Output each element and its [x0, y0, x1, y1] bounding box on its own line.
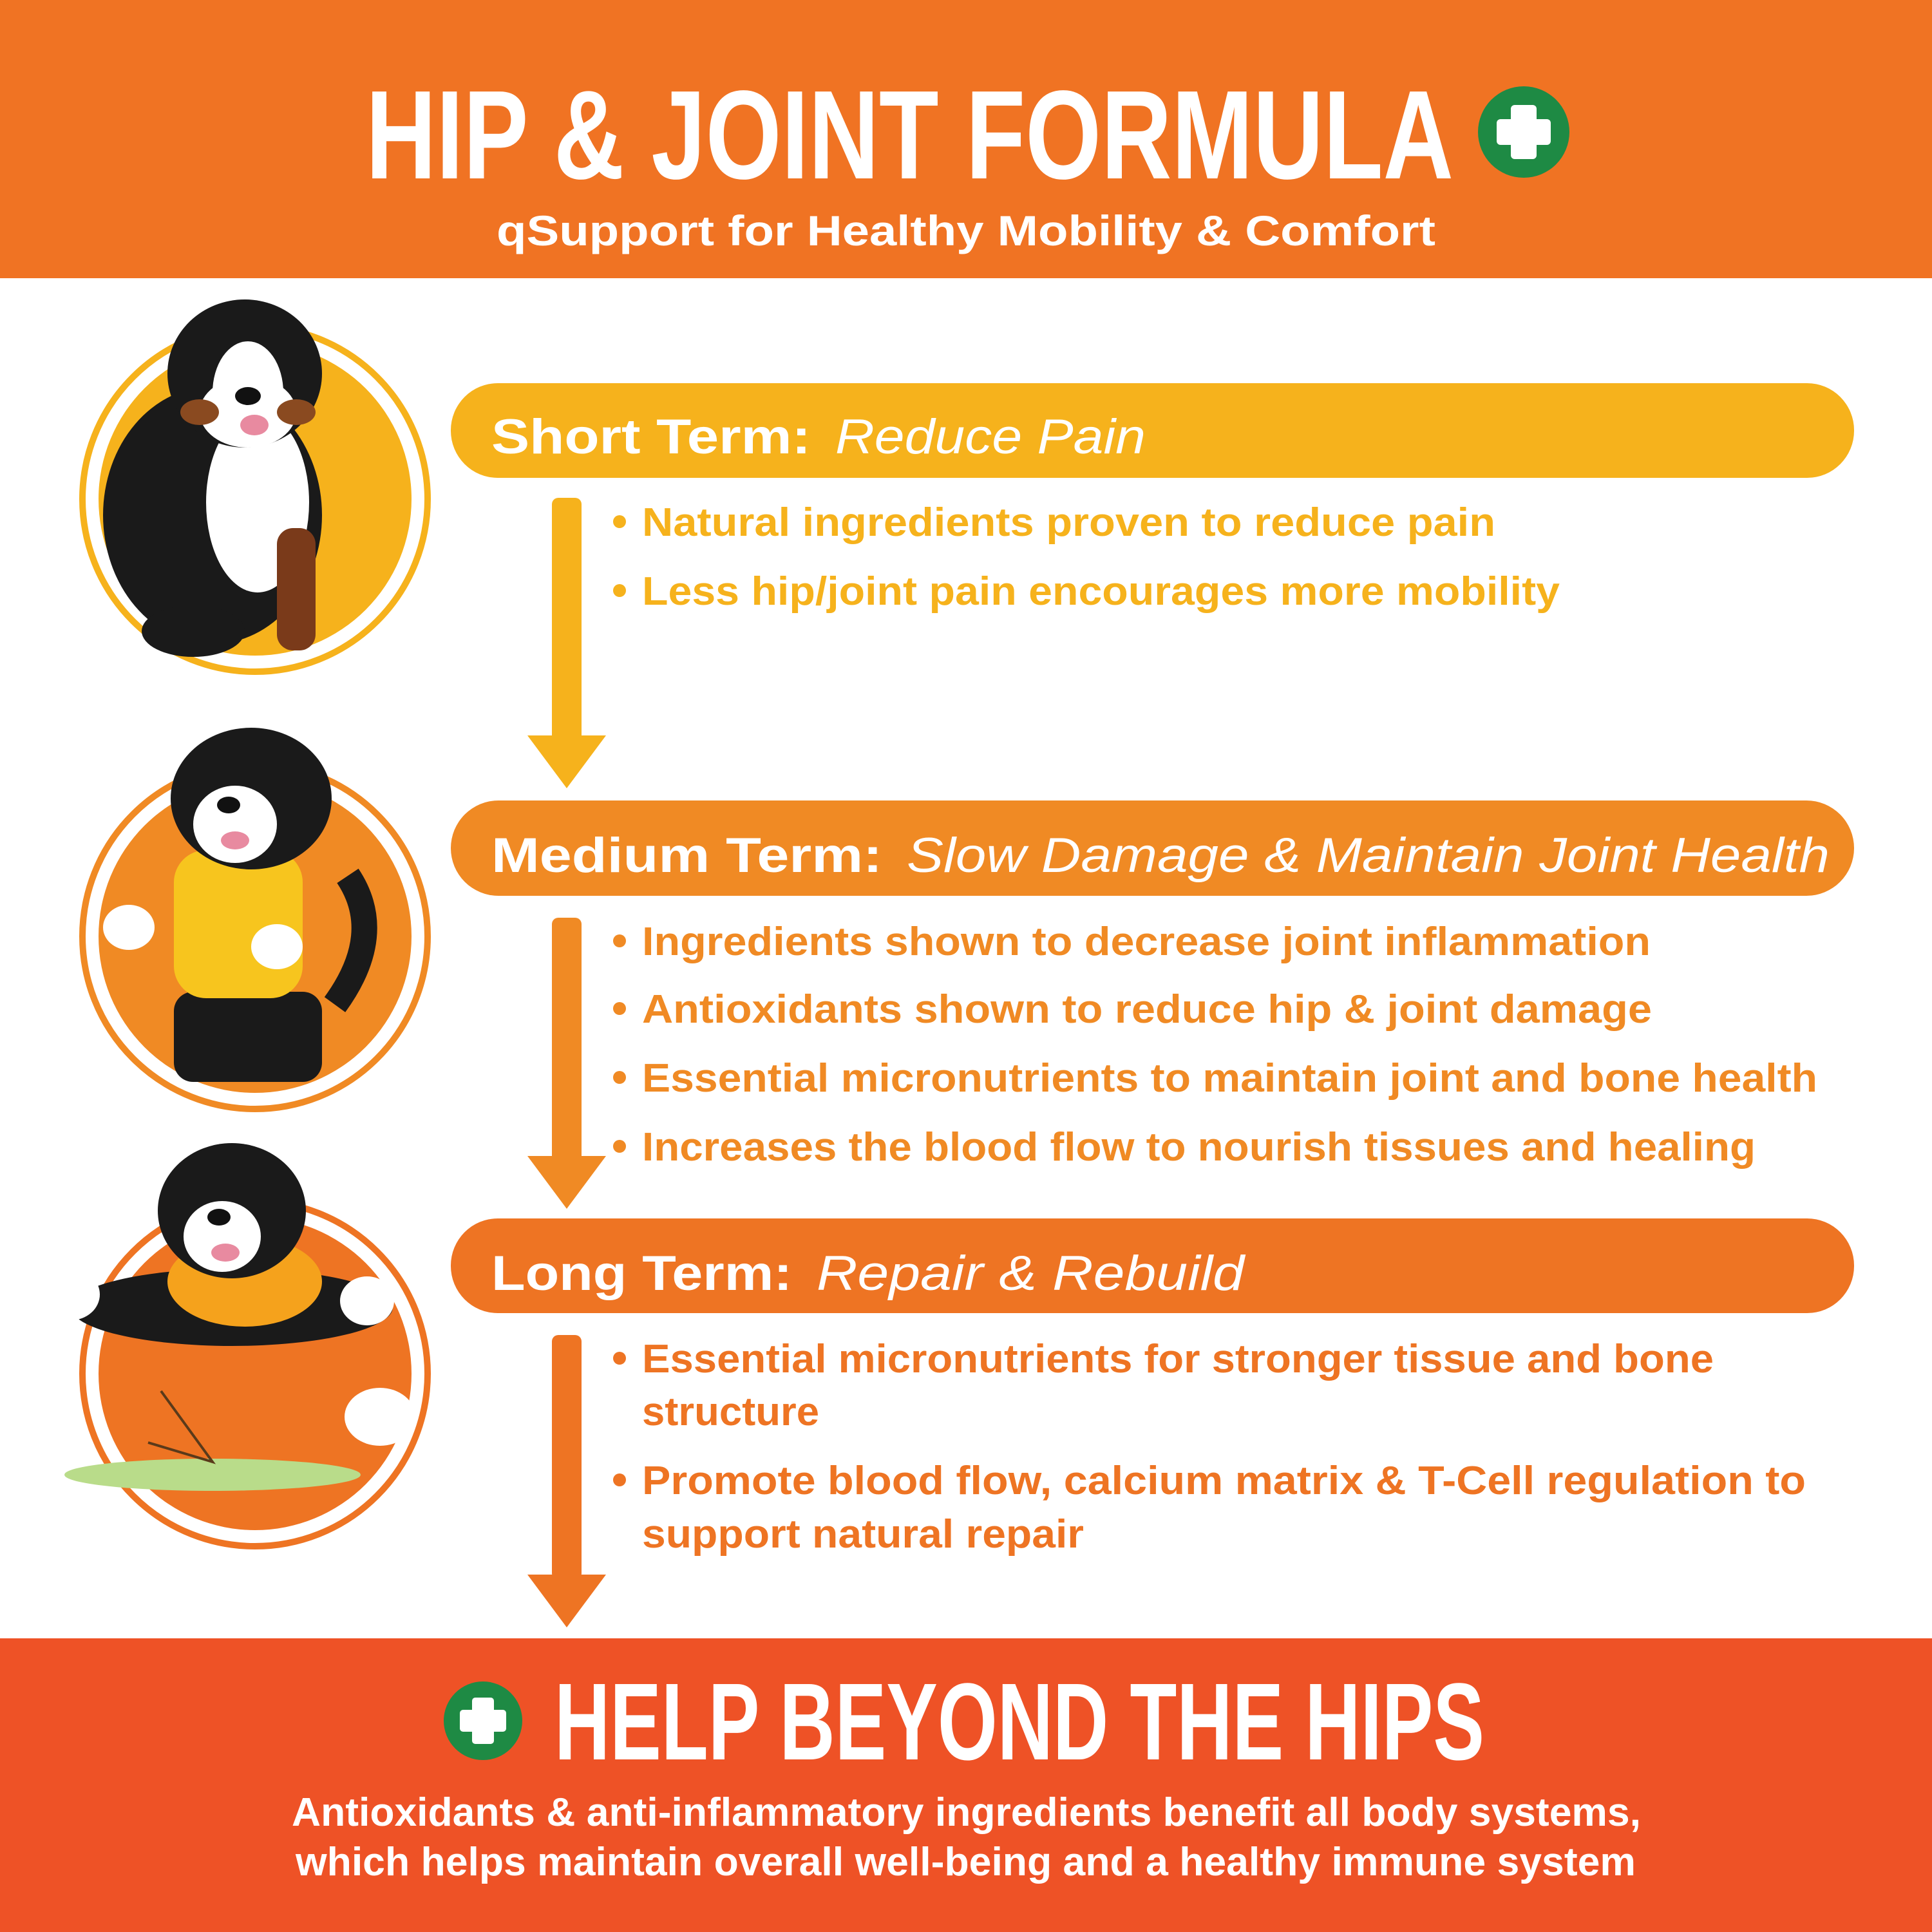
- icon: dog circle 3 (jumping, trampoline): [42, 1143, 428, 1546]
- arrow: medium: [527, 918, 606, 1209]
- bullets: long: Essential micronutrients for stronger tissue and bone: [642, 1337, 1714, 1381]
- icon: green plus footer: [444, 1681, 522, 1760]
- pill: medium term: Medium Term:: [491, 828, 882, 883]
- icon: green plus: [1478, 86, 1569, 178]
- arrow: short: [527, 498, 606, 788]
- panel: medium term: [451, 800, 1854, 1209]
- pill: medium term: [451, 800, 1854, 896]
- pill: short term: Short Term:: [491, 410, 811, 464]
- bullets: short: [613, 500, 1560, 614]
- footer body text: Antioxidants & anti-inflammatory ingredients benefit all body systems,: [292, 1790, 1641, 1835]
- bullets: medium: Increases the blood flow to nourish tissues and healing: [642, 1125, 1756, 1170]
- pill: medium term: Slow Damage & Maintain Joint Health: [907, 828, 1830, 883]
- footer title: HELP BEYOND THE HIPS: [554, 1661, 1484, 1783]
- bullets: medium: Ingredients shown to decrease joint inflammation: [642, 920, 1651, 964]
- pill: short term: [451, 383, 1854, 478]
- title: HIP & JOINT FORMULA: [366, 64, 1454, 205]
- bullets: medium: Antioxidants shown to reduce hip & joint damage: [642, 987, 1652, 1032]
- bullets: long: Promote blood flow, calcium matrix & T-Cell regulation to: [642, 1459, 1806, 1503]
- bullets: long: support natural repair: [642, 1512, 1084, 1557]
- arrow: long: [527, 1335, 606, 1627]
- icon: dog circle 1 (sitting): [82, 299, 428, 672]
- bullets: short: Natural ingredients proven to reduce pain: [642, 500, 1495, 545]
- bullets: medium: Essential micronutrients to maintain joint and bone health: [642, 1056, 1817, 1101]
- footer body text: [292, 1790, 1641, 1884]
- footer body text: which helps maintain overall well-being and a healthy immune system: [295, 1840, 1636, 1884]
- header band: [0, 0, 1932, 278]
- pill: long term: Repair & Rebuild: [817, 1246, 1246, 1301]
- panel: long term: [451, 1218, 1854, 1627]
- bullets: long: [613, 1337, 1806, 1557]
- panel: short term: [451, 383, 1854, 788]
- footer band: [0, 1638, 1932, 1932]
- subtitle: qSupport for Healthy Mobility & Comfort: [497, 207, 1435, 254]
- bullets: long: structure: [642, 1390, 819, 1434]
- bullets: medium: [613, 920, 1817, 1170]
- bullets: short: Less hip/joint pain encourages more mobility: [642, 569, 1560, 614]
- pill: short term: Reduce Pain: [835, 410, 1146, 464]
- icon: dog circle 2 (standing, yellow shirt): [82, 728, 428, 1109]
- pill: long term: Long Term:: [491, 1246, 792, 1301]
- pill: long term: [451, 1218, 1854, 1313]
